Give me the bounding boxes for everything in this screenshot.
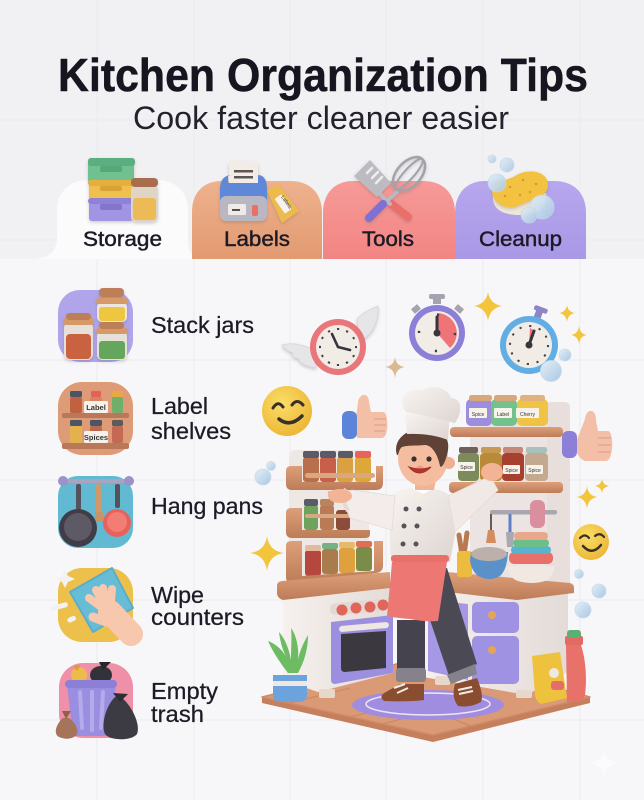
- icon: bubbles near blue stopwatch: [540, 349, 571, 382]
- stove cabinet: [283, 585, 393, 698]
- bottle and sponge: [532, 630, 586, 704]
- small label word: Labels: [279, 195, 293, 211]
- text: wipe counters: Wipe: [151, 582, 204, 608]
- tip: stack jars: [58, 288, 254, 362]
- text: stack jars: Stack jars: [151, 312, 254, 338]
- plant: [268, 628, 308, 702]
- jars row 3: [305, 541, 372, 576]
- apron: [387, 555, 449, 621]
- tab: cleanup: [455, 155, 586, 259]
- text: wipe counters: [151, 582, 244, 630]
- text: label shelves: shelves: [151, 418, 231, 444]
- counter top: [277, 572, 574, 600]
- icon: spice shelf: [58, 382, 133, 455]
- text: empty trash: trash: [151, 701, 204, 727]
- icon: winking smiley: [573, 524, 609, 560]
- text: label shelves: [151, 393, 231, 444]
- icon: thumbs up right: [562, 411, 612, 461]
- tip: wipe counters: [50, 568, 244, 642]
- jar label: spice 3: Spice: [528, 468, 541, 474]
- icon: sparkles: [250, 292, 609, 571]
- back wall unit right: [470, 402, 570, 592]
- floating icons: [250, 292, 609, 618]
- rack unit left: [286, 450, 383, 583]
- tab label: tools: Tools: [362, 228, 414, 251]
- chef shoes: [381, 678, 482, 706]
- text: label shelves: Label: [151, 393, 208, 419]
- icon: blue stopwatch: [500, 305, 558, 374]
- decorative watermark star: [590, 750, 618, 776]
- chef: [328, 387, 503, 706]
- rug: [352, 690, 504, 720]
- icon: winged clock: [282, 306, 378, 375]
- hanging utensils: [486, 500, 557, 547]
- list: kitchen tips: [50, 288, 263, 739]
- chef hands: [328, 463, 503, 503]
- tab label: labels: Labels: [224, 228, 290, 251]
- icon: smiley face: [262, 386, 312, 436]
- small label: spices: Spices: [84, 433, 108, 442]
- jar label: spice 1: Spice: [460, 465, 473, 471]
- lower jars: [458, 447, 548, 481]
- illustration: chef in kitchen: [262, 387, 612, 742]
- chef hat: [402, 387, 460, 440]
- icon: trash can and bags: [56, 662, 138, 739]
- chef jacket: [343, 476, 498, 562]
- chef legs: [396, 568, 477, 684]
- icon: stacked jars: [58, 288, 133, 362]
- icon: hand wiping: [50, 568, 133, 642]
- right cabinet: [423, 592, 568, 698]
- icon: hanging pans: [58, 476, 134, 548]
- tab: storage: [30, 158, 204, 259]
- jar label: label: Label: [497, 412, 509, 418]
- icon: sponge with bubbles: [488, 155, 554, 223]
- tip: label shelves: [58, 382, 231, 455]
- tab: tools: [323, 151, 455, 259]
- lower panel: [0, 259, 644, 800]
- text: empty trash: Empty: [151, 678, 219, 704]
- upper shelf: [450, 427, 563, 437]
- icon: storage containers: [88, 158, 158, 222]
- icon: bubbles right: [574, 570, 606, 618]
- jar label: spice: Spice: [472, 412, 484, 418]
- chef head: [396, 428, 455, 490]
- tabs row: [30, 151, 586, 259]
- counter items: [457, 532, 555, 583]
- upper jars: [466, 395, 548, 426]
- icon: purple stopwatch: [409, 294, 465, 361]
- text: empty trash: [151, 678, 219, 727]
- jar label: cherry: Cherry: [520, 412, 535, 418]
- tab: labels: [192, 162, 322, 259]
- icon: bubbles left: [255, 462, 276, 485]
- floor: [262, 655, 590, 742]
- jars row 2: [304, 499, 350, 530]
- jar label: spice 2: Spice: [505, 468, 518, 474]
- text: hang pans: Hang pans: [151, 493, 263, 519]
- icon: thumbs up left: [342, 395, 387, 439]
- jars row 1: [303, 451, 371, 482]
- subtitle: Cook faster cleaner easier: [133, 100, 509, 136]
- text: wipe counters: counters: [151, 604, 244, 630]
- tip: empty trash: [56, 662, 219, 739]
- lower shelf: [449, 482, 563, 493]
- icon: spatula and whisk: [354, 151, 431, 218]
- small label: label: Label: [86, 403, 106, 412]
- tip: hang pans: [58, 476, 263, 548]
- tab label: cleanup: Cleanup: [479, 228, 562, 251]
- tab label: storage: Storage: [83, 228, 162, 251]
- title: Kitchen Organization Tips: [58, 49, 588, 101]
